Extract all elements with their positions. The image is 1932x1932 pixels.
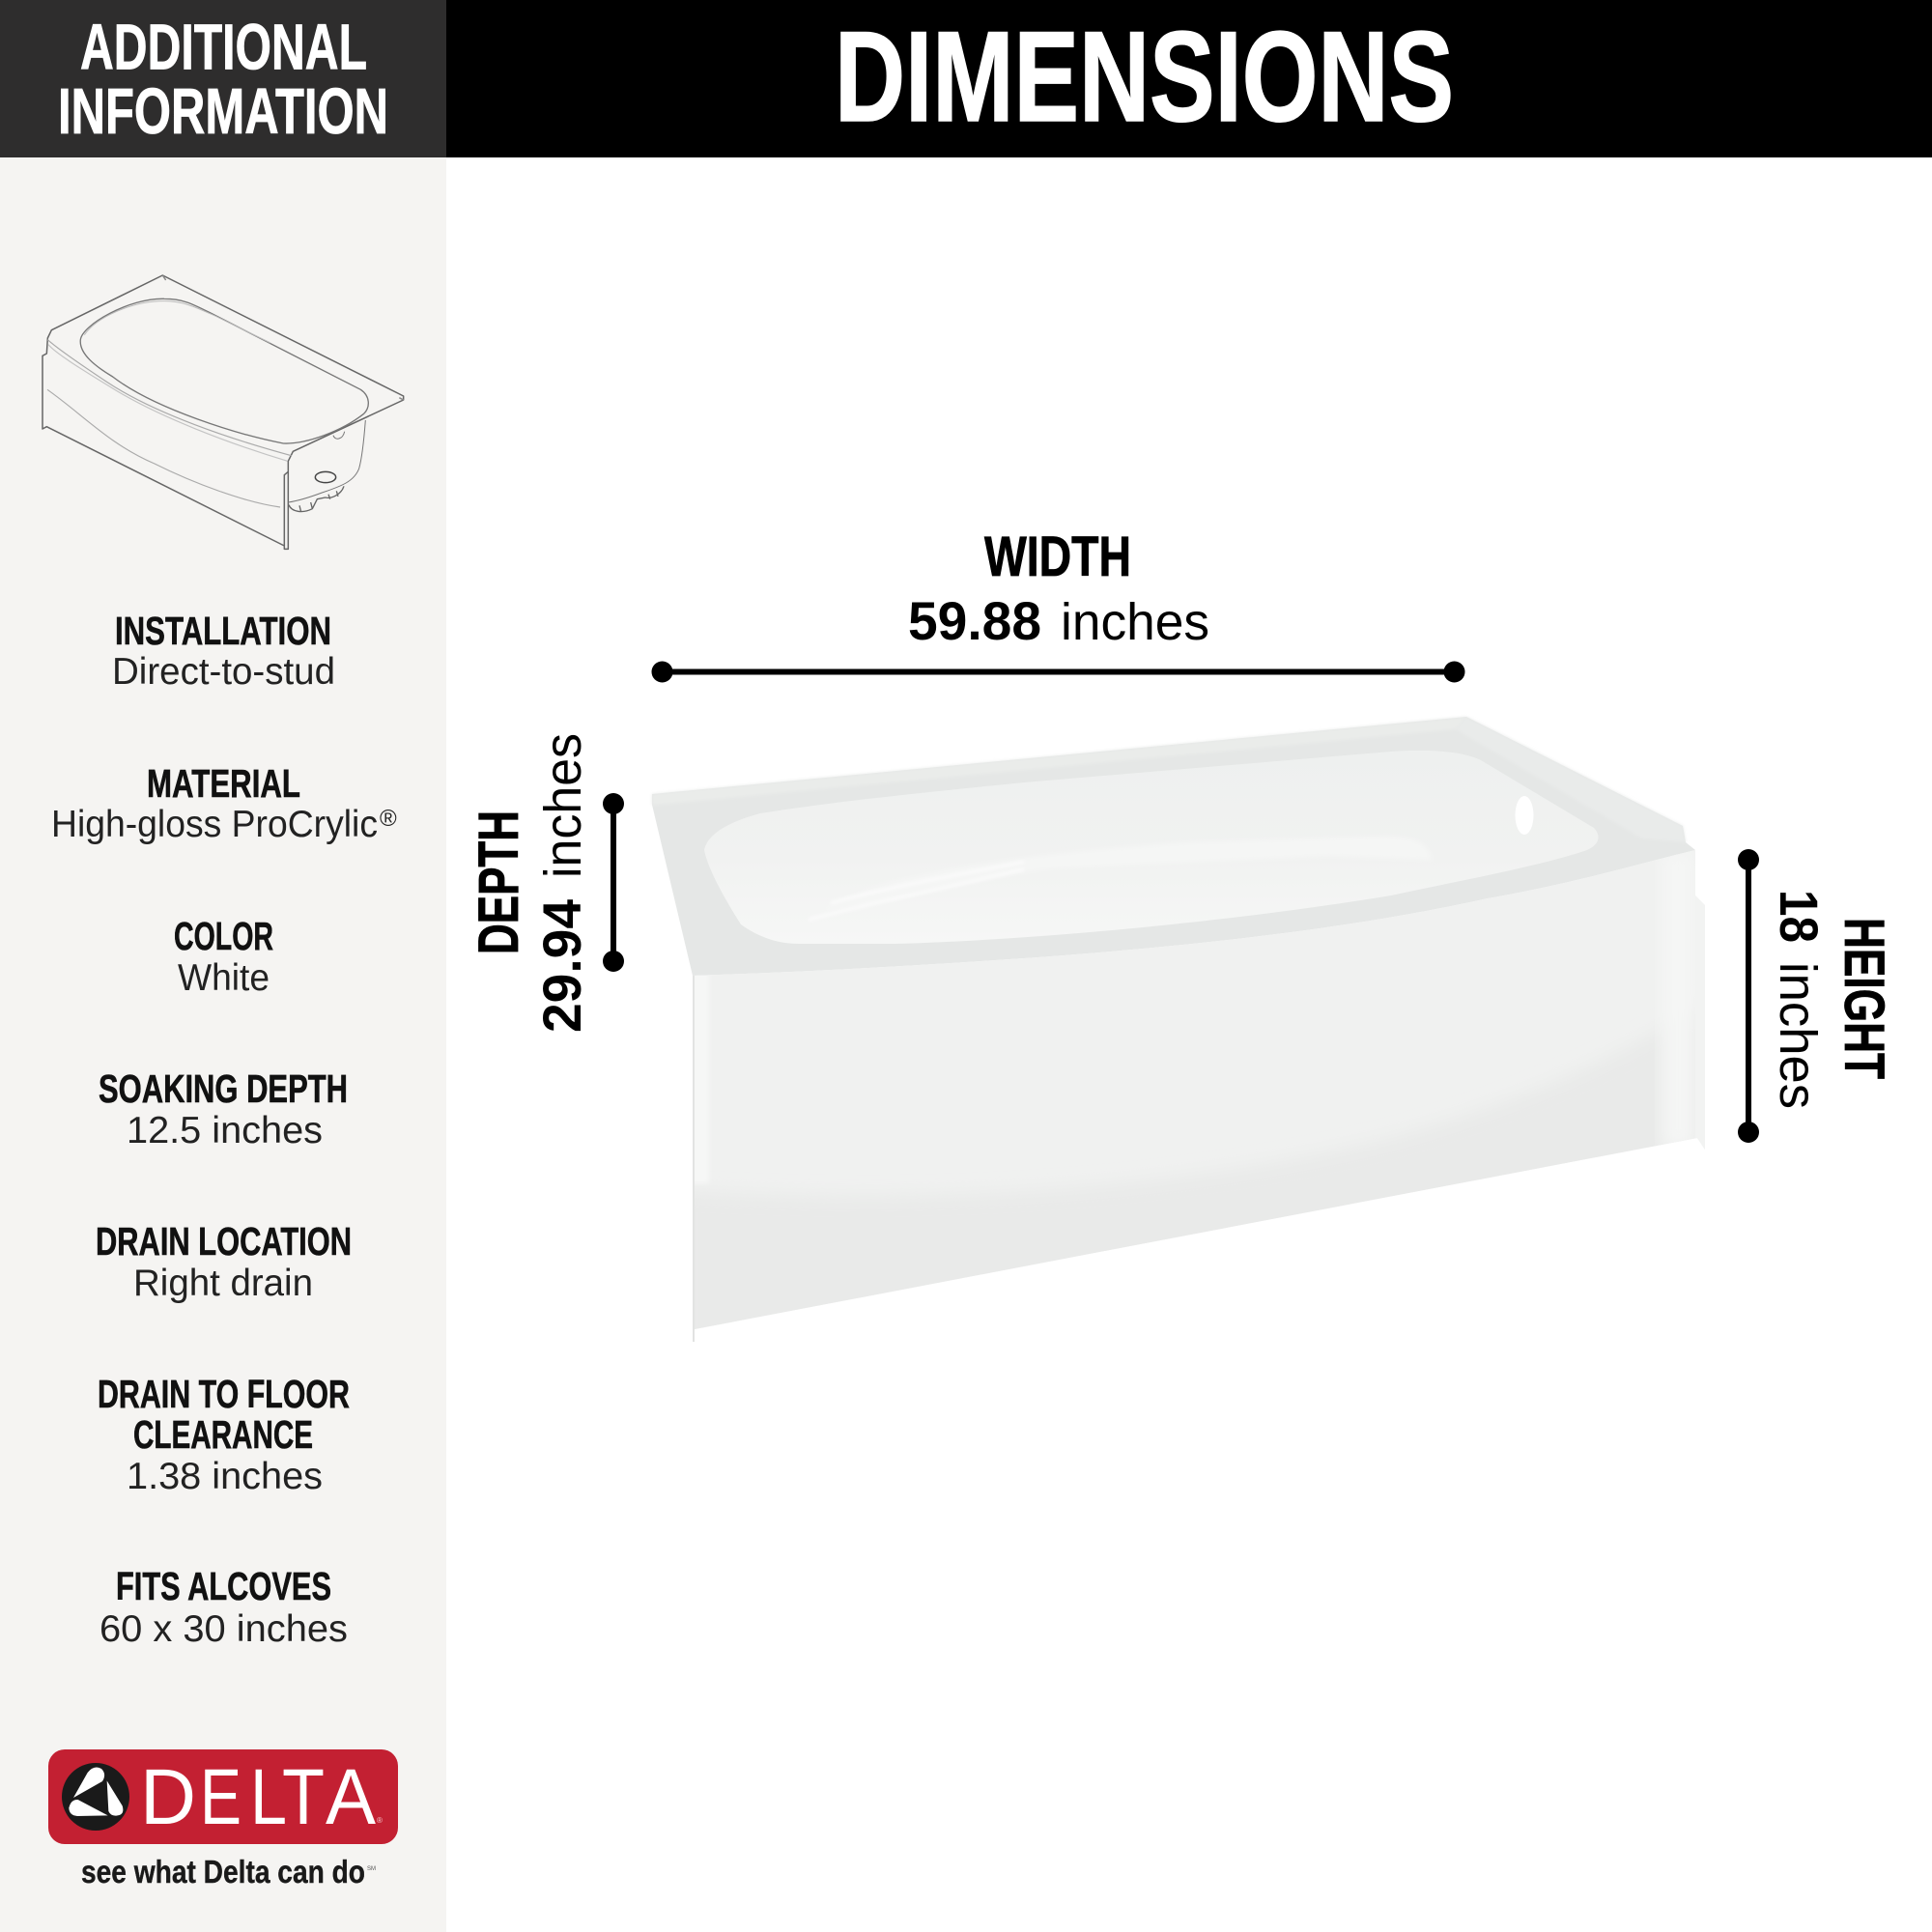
spec: soaking depth: 12.5 inches	[127, 1110, 323, 1151]
tub rim deck	[652, 717, 1695, 976]
header: additional information: ADDITIONAL	[80, 12, 367, 83]
icon: Delta triangle mark	[62, 1763, 129, 1831]
tub seat ledge	[809, 837, 1432, 920]
dimension: width	[651, 526, 1464, 682]
spec: installation	[112, 609, 335, 693]
spec: color: White	[178, 957, 270, 999]
wordmark: DELTA: A	[326, 1753, 376, 1841]
dimension: height: HEIGHT	[1833, 918, 1895, 1079]
dimension: depth: 29.94	[531, 899, 592, 1033]
spec: material	[51, 761, 397, 845]
photo: white bathtub	[652, 717, 1710, 1352]
depth arrow	[603, 793, 624, 972]
dimension: depth: inches	[534, 733, 592, 878]
dimension: width: 59.88	[908, 590, 1041, 651]
dimension: height: 18	[1769, 890, 1830, 943]
spec: color	[174, 914, 273, 999]
tub apron	[676, 840, 1710, 1352]
wordmark: DELTA: T	[282, 1753, 325, 1841]
spec: drain location	[96, 1219, 352, 1304]
logo: Delta: SM	[367, 1866, 376, 1872]
header: additional information	[0, 0, 446, 157]
spec: drain to floor clearance: DRAIN TO FLOOR	[98, 1372, 350, 1416]
header: additional information: INFORMATION	[58, 75, 388, 148]
spec: drain location: Right drain	[133, 1263, 313, 1304]
header: dimensions	[446, 0, 1932, 157]
logo: Delta	[48, 1749, 398, 1889]
dimension: width: WIDTH	[984, 526, 1131, 588]
logo: Delta: ®	[377, 1816, 383, 1825]
spec: fits alcoves	[99, 1564, 348, 1650]
spec: drain location: DRAIN LOCATION	[96, 1219, 352, 1264]
spec: installation: INSTALLATION	[115, 609, 331, 653]
header: dimensions: DIMENSIONS	[835, 6, 1454, 149]
dimension: height: inches	[1769, 962, 1827, 1109]
spec: drain to floor clearance: 1.38 inches	[127, 1456, 323, 1497]
dimension: height	[1738, 849, 1895, 1143]
spec: material: High-gloss ProCrylic	[51, 804, 378, 845]
wordmark: DELTA	[140, 1753, 376, 1841]
spec: color: COLOR	[174, 914, 273, 958]
spec: drain to floor clearance	[98, 1372, 350, 1497]
wordmark: DELTA: L	[250, 1753, 287, 1841]
dimension: depth	[468, 733, 624, 1033]
spec: fits alcoves: FITS ALCOVES	[116, 1564, 331, 1608]
spec: material: MATERIAL	[147, 761, 300, 806]
overflow hole	[1515, 796, 1534, 835]
spec: drain to floor clearance: CLEARANCE	[133, 1412, 313, 1457]
logo: Delta: see what Delta can do	[81, 1854, 365, 1889]
tub basin	[704, 751, 1599, 944]
spec: soaking depth	[99, 1066, 348, 1151]
wordmark: DELTA: E	[200, 1753, 242, 1841]
width arrow	[651, 661, 1464, 682]
icon: bathtub line drawing	[43, 275, 404, 549]
wordmark: DELTA: D	[140, 1753, 196, 1841]
height arrow	[1738, 849, 1759, 1143]
dimension: depth: DEPTH	[468, 810, 530, 954]
spec: installation: Direct-to-stud	[112, 651, 335, 693]
spec: fits alcoves: 60 x 30 inches	[99, 1608, 348, 1650]
dimension: width: inches	[1061, 593, 1209, 651]
spec: material: ®	[380, 806, 397, 832]
spec: soaking depth: SOAKING DEPTH	[99, 1066, 348, 1111]
